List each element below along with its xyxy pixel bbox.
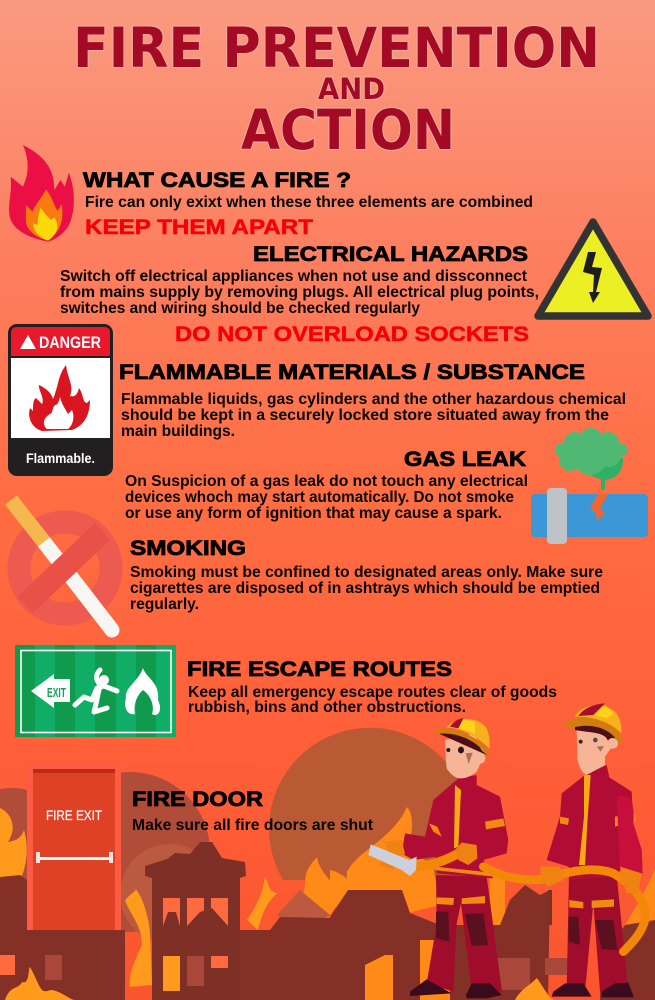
section: fire door: Make sure all fire doors are shut	[132, 817, 373, 834]
ruins behind firefighters	[330, 885, 550, 1000]
icon: fire door	[27, 763, 121, 930]
section: electrical hazards: switches and wiring should be checked regularly	[60, 300, 420, 317]
section: electrical hazards: from mains supply by removing plugs. All electrical plug points,	[60, 284, 539, 301]
section: gas leak	[125, 448, 528, 522]
section: fire escape routes: Keep all emergency escape routes clear of goods	[188, 684, 557, 701]
section: fire escape routes	[187, 658, 557, 716]
section: what cause a fire: WHAT CAUSE A FIRE ?	[83, 169, 351, 192]
flames right of building	[247, 877, 277, 930]
section: gas leak: devices whoch may start automatically. Do not smoke	[125, 489, 514, 506]
section: fire escape routes: rubbish, bins and other obstructions.	[188, 699, 466, 716]
hose	[417, 853, 645, 952]
section: electrical hazards: Switch off electrical appliances when not use and dissconnect	[60, 268, 527, 285]
icon: danger flammable sign: DANGER	[39, 333, 101, 352]
firefighter left	[402, 718, 508, 998]
flame beside building	[125, 888, 152, 987]
ruins right of building	[277, 890, 330, 930]
section: flammable materials: main buildings.	[121, 423, 235, 440]
icon: exit sign: EXIT	[47, 685, 66, 700]
central ruined building	[145, 842, 246, 1000]
section: flammable materials	[119, 361, 626, 440]
section: electrical hazards: ELECTRICAL HAZARDS	[253, 243, 528, 266]
icon: electrical hazard triangle	[538, 222, 648, 316]
section: electrical hazards	[60, 243, 539, 346]
icon: no smoking	[11, 500, 112, 630]
icon: gas leak pipe	[531, 428, 648, 544]
icon: danger flammable sign	[8, 324, 113, 476]
section: smoking	[130, 537, 603, 613]
burning city scene	[0, 728, 655, 1000]
section: gas leak: or use any form of ignition that may cause a spark.	[125, 505, 502, 522]
section: fire escape routes: FIRE ESCAPE ROUTES	[187, 658, 452, 681]
title: FIRE PREVENTION	[73, 16, 600, 80]
icon: danger flammable sign: Flammable.	[26, 451, 95, 466]
big flame behind firefighters	[345, 807, 440, 915]
title	[73, 16, 600, 162]
section: flammable materials: FLAMMABLE MATERIALS / SUBSTANCE	[119, 361, 585, 384]
ruins left	[0, 875, 27, 1000]
flames left	[0, 808, 27, 905]
illustration: firefighters	[368, 703, 645, 998]
section: fire door	[132, 788, 373, 834]
section: fire door: FIRE DOOR	[132, 788, 263, 811]
firefighter right	[547, 703, 643, 997]
title: ACTION	[241, 98, 455, 162]
bottom-left flame	[5, 967, 75, 1000]
section: gas leak: GAS LEAK	[404, 448, 526, 471]
section: electrical hazards: DO NOT OVERLOAD SOCKETS	[175, 323, 529, 346]
section: smoking: regularly.	[130, 596, 199, 613]
section: smoking: Smoking must be confined to designated areas only. Make sure	[130, 564, 603, 581]
section: what cause a fire: KEEP THEM APART	[85, 216, 313, 239]
section: gas leak: On Suspicion of a gas leak do not touch any electrical	[125, 473, 528, 490]
section: smoking: cigarettes are disposed of in ashtrays which should be emptied	[130, 580, 600, 597]
section: smoking: SMOKING	[130, 537, 246, 560]
icon: flame	[9, 145, 74, 242]
icon: fire door: FIRE EXIT	[46, 807, 102, 823]
section: flammable materials: Flammable liquids, gas cylinders and the other hazardous chemical	[121, 391, 626, 408]
icon: exit sign	[15, 645, 176, 737]
section: flammable materials: should be kept in a securely locked store situated away from the	[121, 407, 609, 424]
nozzle	[368, 844, 417, 876]
section: what cause a fire	[83, 169, 533, 239]
section: what cause a fire: Fire can only exixt when these three elements are combined	[85, 194, 533, 211]
gloves	[378, 840, 477, 870]
title: AND	[318, 72, 385, 106]
